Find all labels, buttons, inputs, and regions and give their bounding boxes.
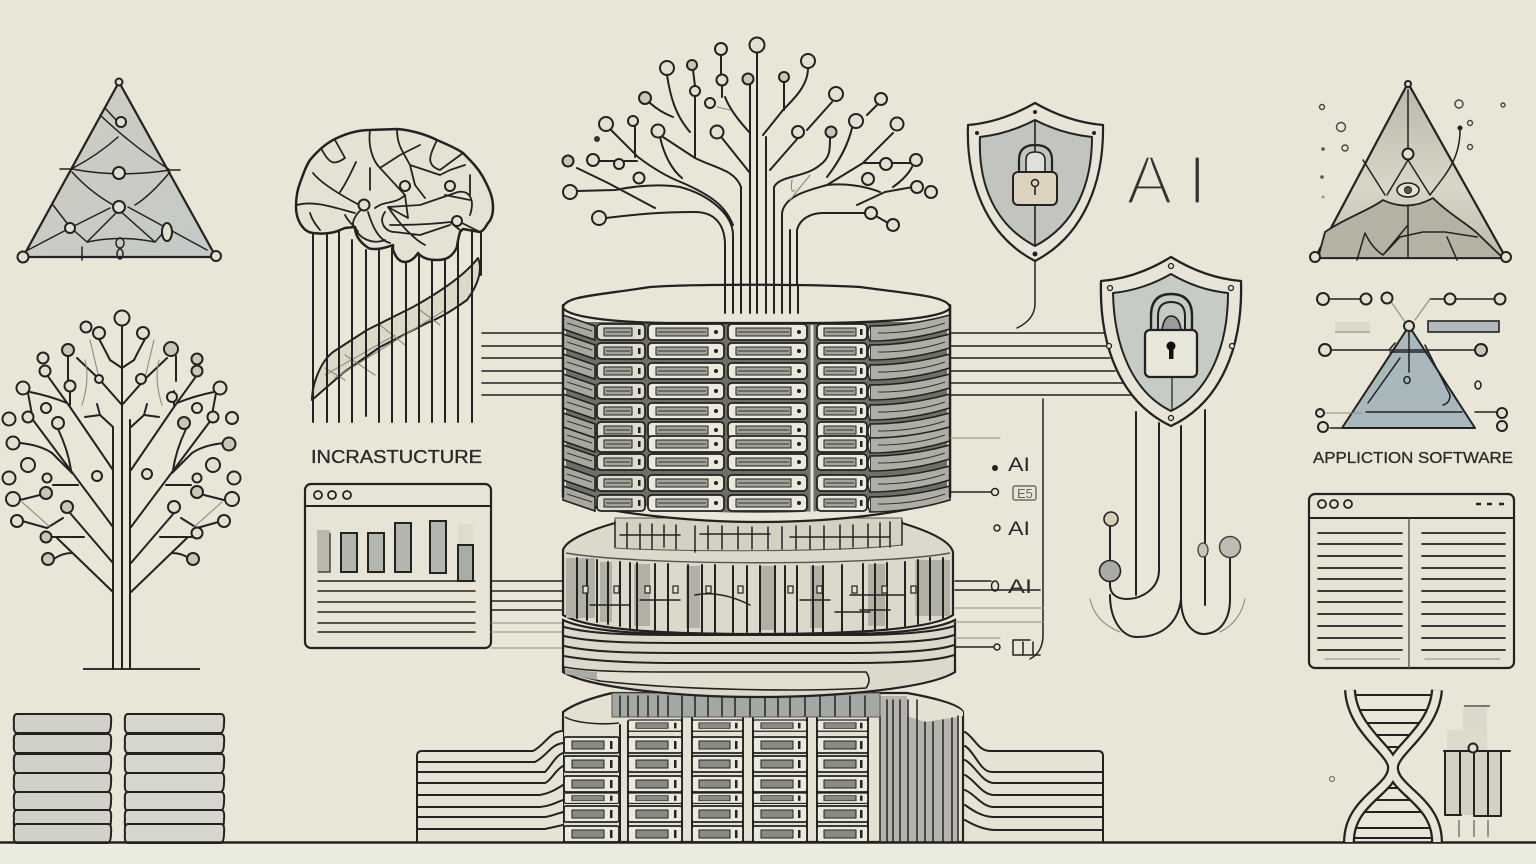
cables: right of stack xyxy=(950,333,1132,659)
box label xyxy=(1013,640,1040,655)
server stack: upper tier xyxy=(563,285,950,522)
drive rows xyxy=(564,720,868,842)
panel: browser window with text lines xyxy=(1309,494,1514,668)
label: infrastructure: INCRASTUCTURE xyxy=(311,447,482,467)
server stack: bottom tier xyxy=(563,693,963,842)
icon: eye triangle top right xyxy=(1310,81,1511,262)
trunk lines xyxy=(577,52,913,313)
large AI heading: AI xyxy=(1126,141,1207,219)
nodes xyxy=(562,38,937,231)
server stack: middle drum with vertical drives xyxy=(563,523,953,634)
icon: network triangle top left xyxy=(18,78,221,262)
cables: bottom right ribbon xyxy=(965,732,1103,842)
drive rows xyxy=(563,315,950,512)
padlock xyxy=(1013,145,1057,205)
icon: DNA helix xyxy=(1349,690,1437,842)
server stack: middle neck xyxy=(615,518,902,552)
label: application software: APPLICTION SOFTWARE xyxy=(1313,450,1513,467)
left branches xyxy=(20,339,122,592)
stem xyxy=(1017,261,1035,328)
icon: blue triangle with nodes xyxy=(1316,292,1507,432)
hanging cables xyxy=(1090,410,1245,637)
padlock xyxy=(1145,294,1197,377)
cables: left of stack xyxy=(482,333,563,648)
tree nodes xyxy=(2,310,240,565)
body xyxy=(563,305,950,522)
box label: E5 xyxy=(1017,486,1033,501)
bar chart xyxy=(317,521,473,581)
ground line xyxy=(0,841,1536,844)
icon: small server rack xyxy=(1330,706,1510,837)
panel: browser window with bar chart xyxy=(305,484,491,648)
cables: bottom left ribbon xyxy=(417,731,563,842)
ribbon xyxy=(312,258,480,400)
icon: binary tree left xyxy=(2,310,240,669)
data lines xyxy=(313,231,481,422)
server stack: lower neck xyxy=(612,693,880,717)
AI labels column xyxy=(992,455,1040,655)
AI labels column: AI xyxy=(1008,577,1032,598)
AI labels column: AI xyxy=(1008,519,1030,540)
lid xyxy=(563,285,950,323)
icon: tree of nodes above stack xyxy=(562,38,937,313)
right branches xyxy=(122,339,224,592)
icon: large shield xyxy=(1090,257,1245,637)
icon: brain with data lines xyxy=(296,129,493,422)
scattered dots xyxy=(1320,100,1505,151)
brain folds xyxy=(297,129,480,245)
AI labels column: AI xyxy=(1008,455,1030,476)
brain outline xyxy=(296,129,493,262)
box label xyxy=(1013,486,1036,501)
icon: server stacks bottom left xyxy=(14,714,224,843)
server stack: banded tier xyxy=(563,620,955,697)
icon: small shield xyxy=(968,103,1103,328)
